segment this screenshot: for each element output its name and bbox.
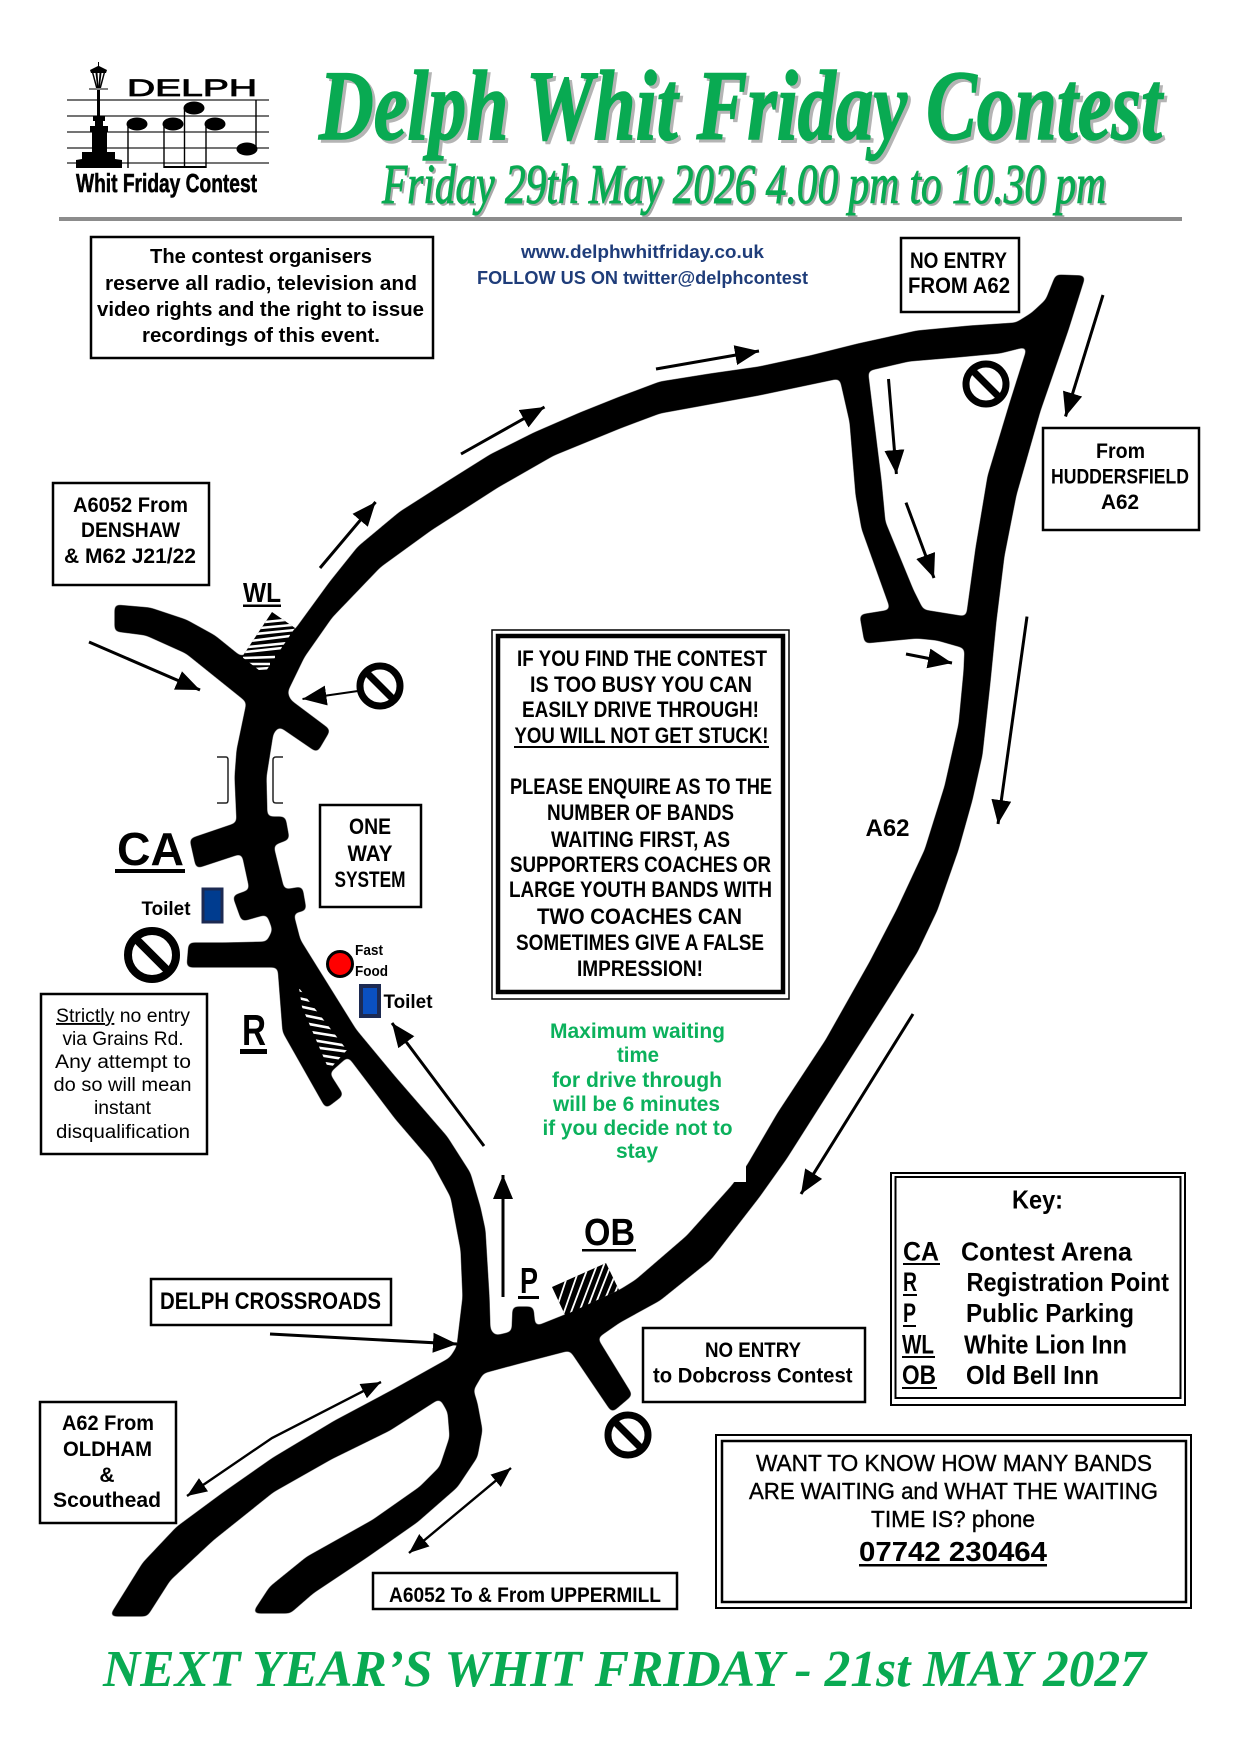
panel: drive through notice: PLEASE ENQUIRE AS TO THE (510, 774, 772, 799)
panel: key: Public Parking (966, 1298, 1134, 1328)
arrow: two way Oldham (187, 1382, 381, 1496)
panel: drive through notice: NUMBER OF BANDS (547, 800, 734, 825)
logo: Delph Whit Friday Contest (67, 62, 269, 198)
panel: drive through notice: EASILY DRIVE THROUGH! (522, 697, 759, 722)
panel: key: OB (902, 1360, 936, 1390)
panel: no entry to Dobcross: to Dobcross Contest (653, 1364, 853, 1388)
panel: A6052 from Denshaw (53, 483, 209, 585)
panel: drive through notice: SUPPORTERS COACHES OR (510, 852, 771, 877)
icon: toilet left: Toilet (142, 899, 191, 920)
arrow: short stub (906, 654, 952, 663)
panel: from Huddersfield: From (1096, 440, 1145, 463)
logo: Delph Whit Friday Contest: DELPH (127, 75, 257, 102)
panel: drive through notice: TWO COACHES CAN (537, 904, 742, 929)
panel: key: P (903, 1298, 916, 1328)
icon: toilet right: Toilet (384, 992, 433, 1013)
website and twitter: www.delphwhitfriday.co.uk (520, 242, 765, 262)
panel: drive through notice (492, 630, 789, 999)
arrow: side road upper (888, 379, 896, 474)
panel: A6052 to Uppermill: A6052 To & From UPPERMILL (389, 1584, 661, 1607)
panel: rights notice: recordings of this event. (142, 325, 380, 347)
arrow: A62 down (998, 617, 1027, 824)
green waiting time note: Maximum waiting (550, 1020, 725, 1043)
green waiting time note: for drive through (552, 1069, 722, 1092)
panel: waiting time phone line: ARE WAITING and WHAT THE WAITING (749, 1478, 1158, 1504)
panel: Grains Rd warning: disqualification (56, 1122, 190, 1143)
panel: Delph crossroads (151, 1279, 391, 1325)
panel: one way system: WAY (348, 841, 393, 866)
label: A62: A62 (866, 815, 910, 842)
panel: from Huddersfield (1043, 428, 1199, 530)
icon: toilet right (361, 986, 433, 1016)
icon: fast food: Fast (355, 942, 383, 959)
panel: drive through notice: IS TOO BUSY YOU CAN (530, 672, 752, 697)
panel: waiting time phone line (716, 1435, 1191, 1608)
artefact on A62 (733, 1166, 746, 1182)
panel: drive through notice: IF YOU FIND THE CONTEST (517, 646, 767, 671)
panel: from Huddersfield: HUDDERSFIELD (1051, 466, 1189, 488)
arrow: main street north (392, 1023, 484, 1146)
panel: drive through notice: IMPRESSION! (577, 956, 703, 981)
panel: no entry to Dobcross: NO ENTRY (705, 1339, 801, 1362)
panel: key: Key: (1012, 1184, 1063, 1214)
panel: key: Old Bell Inn (966, 1360, 1099, 1390)
panel: key: R (903, 1267, 917, 1297)
brackets at narrow road (217, 757, 283, 803)
label: CA: CA (117, 823, 184, 875)
panel: rights notice (91, 237, 433, 358)
panel: Grains Rd warning (41, 994, 207, 1154)
panel: drive through notice: YOU WILL NOT GET STUCK! (514, 723, 768, 748)
green waiting time note (542, 1020, 732, 1163)
panel: Delph crossroads: DELPH CROSSROADS (160, 1288, 381, 1315)
panel: key (891, 1173, 1185, 1405)
panel: drive through notice: WAITING FIRST, AS (551, 827, 730, 852)
arrow: to Delph crossroads (270, 1334, 457, 1344)
icon: no entry White Lion (360, 666, 400, 706)
green waiting time note: will be 6 minutes (552, 1093, 720, 1116)
panel: no entry from A62: NO ENTRY (910, 248, 1007, 273)
header rule (59, 217, 1182, 221)
panel: from Huddersfield: A62 (1101, 491, 1139, 514)
arrow: two way Uppermill (409, 1468, 511, 1553)
panel: Grains Rd warning: Any attempt to (55, 1052, 191, 1073)
website and twitter (477, 242, 808, 288)
panel: Grains Rd warning: instant (94, 1098, 152, 1119)
arrow: from Denshaw (89, 642, 200, 690)
hatch: Registration Point (299, 988, 347, 1066)
panel: rights notice: The contest organisers (150, 246, 372, 268)
panel: key: Registration Point (966, 1267, 1169, 1297)
panel: key: Contest Arena (961, 1236, 1133, 1266)
label: OB: OB (584, 1212, 635, 1254)
panel: Grains Rd warning: via Grains Rd. (62, 1029, 184, 1050)
road map (110, 275, 1085, 1616)
panel: no entry from A62 (901, 238, 1019, 312)
panel: key: WL (902, 1330, 934, 1360)
arrow: near parking (502, 1175, 504, 1297)
panel: rights notice: video rights and the right to issue (97, 299, 424, 321)
icon: no entry Grains Rd (128, 931, 176, 979)
hatch: White Lion Inn (242, 612, 295, 674)
arrow: side road lower (906, 503, 934, 578)
panel: Grains Rd warning: do so will mean (54, 1075, 192, 1096)
arrow: upper road (461, 407, 544, 454)
website and twitter: FOLLOW US ON twitter@delphcontest (477, 268, 808, 288)
panel: drive through notice: SOMETIMES GIVE A FALSE (516, 930, 764, 955)
icon: fast food: Food (355, 963, 388, 980)
label: P: P (520, 1260, 538, 1301)
arrow: top road (656, 351, 759, 369)
panel: key: White Lion Inn (964, 1330, 1127, 1360)
label: WL: WL (243, 577, 281, 608)
panel: A62 from Oldham: Scouthead (53, 1489, 161, 1512)
panel: drive through notice: LARGE YOUTH BANDS WITH (509, 877, 772, 902)
green waiting time note: stay (616, 1140, 658, 1163)
panel: A6052 from Denshaw: & M62 J21/22 (64, 545, 196, 568)
panel: A6052 from Denshaw: DENSHAW (81, 519, 180, 542)
panel: A62 from Oldham: & (99, 1464, 115, 1487)
panel: key: CA (903, 1236, 939, 1266)
panel: A6052 from Denshaw: A6052 From (73, 494, 188, 517)
panel: no entry from A62: FROM A62 (908, 273, 1010, 298)
panel: A62 from Oldham (40, 1402, 176, 1523)
logo: Delph Whit Friday Contest: Whit Friday Contest (76, 168, 257, 198)
panel: A62 from Oldham: A62 From (62, 1412, 154, 1435)
label: R: R (242, 1006, 266, 1055)
icon: toilet left (142, 889, 222, 922)
panel: A6052 to Uppermill (373, 1573, 677, 1609)
arrow: to no entry at White Lion (302, 691, 358, 699)
arrow: from Huddersfield (1066, 295, 1103, 416)
icon: fast food (328, 942, 388, 980)
icon: no entry Dobcross (608, 1415, 648, 1455)
panel: A62 from Oldham: OLDHAM (63, 1438, 152, 1461)
panel: waiting time phone line: 07742 230464 (859, 1536, 1047, 1567)
hatch: Old Bell Inn (552, 1262, 622, 1315)
arrow: A62 lower (801, 1014, 913, 1194)
icon: no entry top right (966, 364, 1006, 404)
panel: one way system: ONE (349, 814, 391, 839)
panel: rights notice: reserve all radio, television and (105, 273, 417, 295)
footer: next year's date: NEXT YEAR’S WHIT FRIDAY - 21st MAY 2027 (102, 1641, 1148, 1698)
panel: no entry to Dobcross (643, 1328, 865, 1402)
panel: waiting time phone line: WANT TO KNOW HOW MANY BANDS (756, 1450, 1152, 1476)
panel: one way system: SYSTEM (334, 867, 406, 892)
arrow: from White Lion (320, 502, 376, 568)
green waiting time note: time (617, 1044, 659, 1067)
panel: Grains Rd warning: Strictly no entry (56, 1006, 191, 1027)
green waiting time note: if you decide not to (542, 1117, 732, 1140)
panel: waiting time phone line: TIME IS? phone (871, 1506, 1035, 1532)
panel: one way system (320, 805, 421, 907)
